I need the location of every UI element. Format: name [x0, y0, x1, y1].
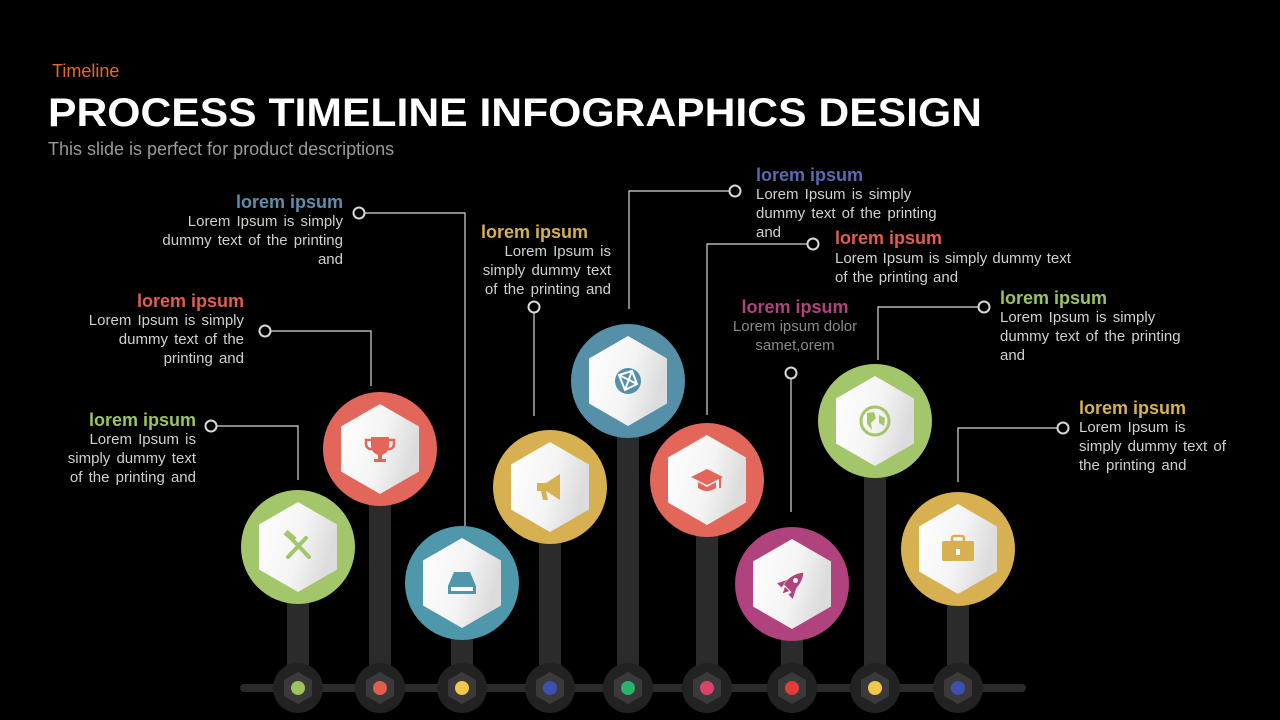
text 9 (gold)	[1079, 398, 1227, 474]
text 6 (red): Lorem Ipsum is simply dummy text	[835, 250, 1072, 267]
step 6: graduation cap	[650, 423, 764, 537]
text 2 (red): dummy text of the	[119, 331, 244, 348]
text 6 (red)	[835, 228, 1072, 286]
text 5 (indigo): dummy text of the printing	[756, 205, 937, 222]
connectors	[206, 186, 1068, 526]
text 3 (blue): and	[318, 251, 343, 268]
text 4 (gold): Lorem Ipsum is	[504, 243, 611, 260]
step 5: globe network	[571, 324, 685, 438]
step 2: trophy	[323, 392, 437, 506]
text 1 (green): of the printing and	[70, 469, 196, 486]
text 3 (blue)	[162, 192, 343, 268]
text 8 (green): dummy text of the printing	[1000, 328, 1181, 345]
text 5 (indigo)	[756, 165, 937, 241]
text 7 (magenta)	[733, 297, 857, 354]
text 8 (green): lorem ipsum	[1000, 288, 1107, 308]
text 1 (green): simply dummy text	[68, 450, 197, 467]
text 2 (red): Lorem Ipsum is simply	[89, 312, 244, 329]
text 5 (indigo): Lorem Ipsum is simply	[756, 186, 912, 203]
text 7 (magenta): samet,orem	[755, 337, 835, 354]
text 6 (red): lorem ipsum	[835, 228, 942, 248]
text 3 (blue): dummy text of the printing	[162, 232, 343, 249]
text 5 (indigo): and	[756, 224, 781, 241]
timeline nodes	[273, 663, 983, 713]
text 8 (green)	[1000, 288, 1181, 364]
label: Timeline: Timeline	[52, 61, 119, 81]
text 9 (gold): simply dummy text of	[1079, 438, 1227, 455]
text 3 (blue): Lorem Ipsum is simply	[188, 213, 343, 230]
text 1 (green)	[68, 410, 197, 486]
step 8: earth	[818, 364, 932, 478]
step 3: drive	[405, 526, 519, 640]
text 7 (magenta): Lorem ipsum dolor	[733, 318, 857, 335]
text 2 (red)	[89, 291, 244, 367]
text 1 (green): lorem ipsum	[89, 410, 196, 430]
title: PROCESS TIMELINE INFOGRAPHICS DESIGN	[48, 91, 982, 135]
text 9 (gold): the printing and	[1079, 457, 1186, 474]
text 8 (green): and	[1000, 347, 1025, 364]
step 1: tools	[241, 490, 355, 604]
text 3 (blue): lorem ipsum	[236, 192, 343, 212]
step 7: rocket	[735, 527, 849, 641]
text 4 (gold): of the printing and	[485, 281, 611, 298]
text 2 (red): printing and	[164, 350, 244, 367]
text 7 (magenta): lorem ipsum	[741, 297, 849, 317]
text 4 (gold): lorem ipsum	[481, 222, 588, 242]
timeline base bar	[240, 430, 1026, 692]
subtitle: This slide is perfect for product descriptions	[48, 139, 394, 159]
text 2 (red): lorem ipsum	[137, 291, 244, 311]
text 8 (green): Lorem Ipsum is simply	[1000, 309, 1156, 326]
text 9 (gold): lorem ipsum	[1079, 398, 1186, 418]
text 6 (red): of the printing and	[835, 269, 958, 286]
text 4 (gold)	[481, 222, 612, 298]
step 9: briefcase	[901, 492, 1015, 606]
text 4 (gold): simply dummy text	[483, 262, 612, 279]
text 5 (indigo): lorem ipsum	[756, 165, 863, 185]
step 4: megaphone	[493, 430, 607, 544]
text 9 (gold): Lorem Ipsum is	[1079, 419, 1186, 436]
text 1 (green): Lorem Ipsum is	[89, 431, 196, 448]
